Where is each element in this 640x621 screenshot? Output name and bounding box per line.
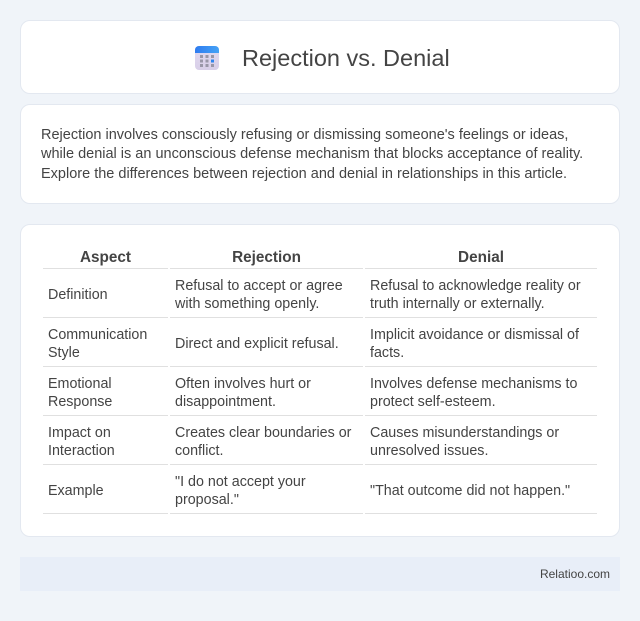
row: definition: Definition — [48, 287, 108, 303]
row: emotional response: Response — [48, 394, 112, 410]
row: example: "I do not accept your — [175, 474, 306, 490]
row: communication style: Direct and explicit refusal. — [175, 336, 339, 352]
row: impact on interaction: Creates clear boundaries or — [175, 425, 351, 441]
panel: title card — [20, 20, 620, 94]
icon: calendar — [195, 46, 219, 70]
row: emotional response: Often involves hurt or — [175, 376, 311, 392]
row: impact on interaction: conflict. — [175, 443, 223, 459]
text block: introduction: Explore the differences between rejection and denial in relationships in this article. — [41, 166, 567, 182]
row: emotional response: Emotional — [48, 376, 112, 392]
panel: comparison table — [20, 224, 620, 537]
footer bar — [20, 557, 620, 591]
row: communication style: Style — [48, 345, 80, 361]
row: impact on interaction: unresolved issues. — [370, 443, 488, 459]
table header: Denial — [458, 249, 504, 266]
row: emotional response: disappointment. — [175, 394, 276, 410]
text block: introduction: while denial is an unconscious defense mechanism that blocks acceptance of reality. — [41, 146, 583, 162]
row: example: Example — [48, 483, 104, 499]
row: emotional response — [48, 376, 577, 410]
row: impact on interaction: Causes misunderstandings or — [370, 425, 559, 441]
title: Rejection vs. Denial — [242, 45, 450, 71]
row: impact on interaction: Interaction — [48, 443, 115, 459]
panel: introduction — [20, 104, 620, 204]
row: emotional response: Involves defense mechanisms to — [370, 376, 577, 392]
row: communication style: facts. — [370, 345, 404, 361]
text block: introduction: Rejection involves consciously refusing or dismissing someone's feelings or ideas, — [41, 126, 568, 142]
row: definition — [48, 278, 581, 312]
table header: Rejection — [232, 249, 301, 266]
row: example: proposal." — [175, 492, 239, 508]
text block: introduction — [41, 126, 583, 182]
row: definition: Refusal to accept or agree — [175, 278, 343, 294]
table header: Aspect — [80, 249, 131, 266]
row: definition: with something openly. — [175, 296, 319, 312]
row: emotional response: protect self-esteem. — [370, 394, 496, 410]
row: definition: Refusal to acknowledge reality or — [370, 278, 581, 294]
footer text: Relatioo.com — [540, 567, 610, 581]
table header — [80, 249, 504, 266]
row: example — [48, 474, 570, 508]
row: communication style: Communication — [48, 327, 147, 343]
row: impact on interaction — [48, 425, 559, 459]
row: communication style: Implicit avoidance or dismissal of — [370, 327, 579, 343]
row: impact on interaction: Impact on — [48, 425, 111, 441]
row: example: "That outcome did not happen." — [370, 483, 570, 499]
row: communication style — [48, 327, 579, 361]
row: definition: truth internally or externally. — [370, 296, 545, 312]
